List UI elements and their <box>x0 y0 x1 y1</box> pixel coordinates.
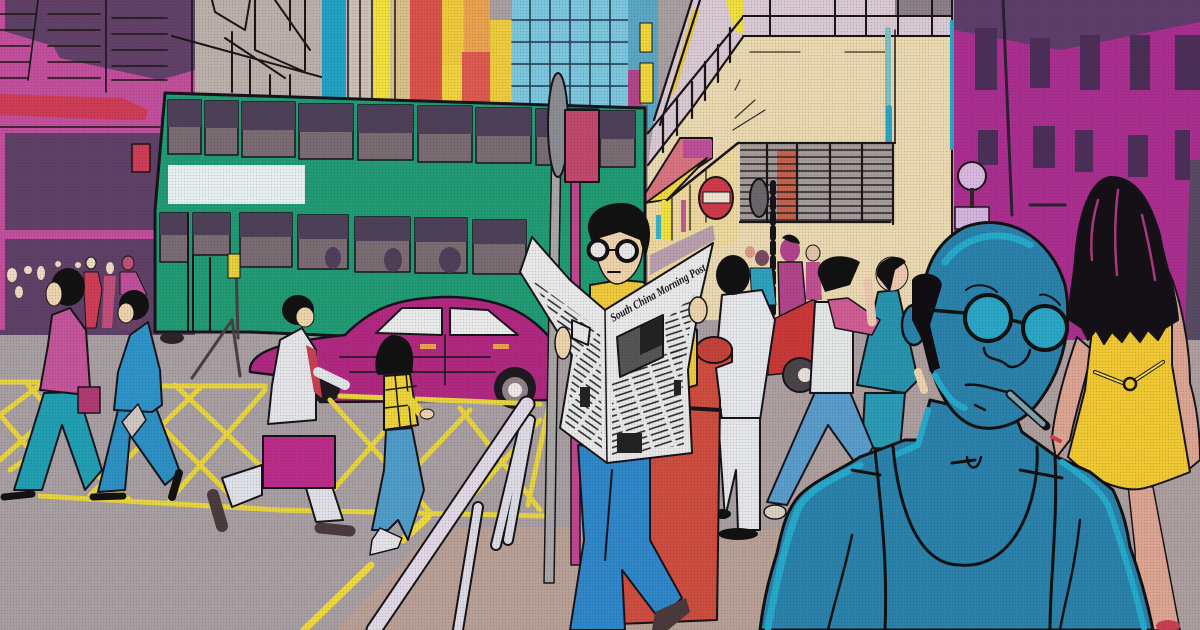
newspaper reader: torso <box>590 280 697 390</box>
foreground man: blue torso in vest <box>760 400 1153 630</box>
woman: long black hair and yellow dress <box>1052 177 1200 630</box>
ear and sideburn <box>902 305 926 345</box>
road sign: no entry <box>699 177 773 315</box>
crowd: figures behind newspaper reader <box>745 235 850 392</box>
newspaper photo <box>617 315 663 377</box>
pedestrian: man in blue suit <box>93 290 180 497</box>
bus: green double decker <box>155 93 645 378</box>
crowd: distant figures by left building <box>84 256 147 330</box>
building: background grey tower <box>172 0 405 100</box>
pedestrian: man in teal jacket <box>857 257 924 450</box>
newspaper: South China Morning Post <box>520 237 713 463</box>
shop front and awning <box>643 138 738 280</box>
street poles and signs <box>544 73 599 583</box>
foreground man: blue head with glasses and cigarette <box>902 222 1068 428</box>
car: magenta saloon <box>250 297 556 409</box>
pedestrian: woman in pink jacket <box>4 268 102 497</box>
right page columns <box>612 345 684 456</box>
masthead text: South China Morning Post <box>608 260 708 325</box>
newspaper reader: hands <box>555 297 707 359</box>
newspaper reader: legs <box>570 445 690 630</box>
postbox: red pillar box <box>618 337 732 624</box>
railing: white metal fence <box>374 404 530 630</box>
nose and mouth <box>984 348 1030 367</box>
shutters on cream building <box>738 143 895 224</box>
street sign: round lamp on post <box>955 162 989 229</box>
pedestrian: man in jeans with white vest <box>764 256 880 519</box>
pedestrian: back view man in white suit <box>713 255 775 540</box>
pedestrian: girl in yellow checked shirt <box>370 335 434 555</box>
background: glass tower <box>512 0 658 135</box>
building: left pink and purple <box>0 0 195 335</box>
newspaper small photos <box>617 433 642 453</box>
background: colourful high-rises <box>322 0 512 102</box>
road markings: yellow box junction <box>0 382 548 630</box>
advertising panel <box>168 165 305 204</box>
ground: street and pavement <box>0 300 1200 630</box>
pedestrian: man in white suit with pink briefcase <box>213 295 350 531</box>
building: cream corner block <box>648 0 954 320</box>
newspaper: left page columns <box>532 280 602 452</box>
round glasses <box>965 295 1011 341</box>
cigarette <box>1010 394 1046 426</box>
building: right magenta block <box>954 0 1200 340</box>
newspaper reader: head with round glasses <box>588 203 650 284</box>
